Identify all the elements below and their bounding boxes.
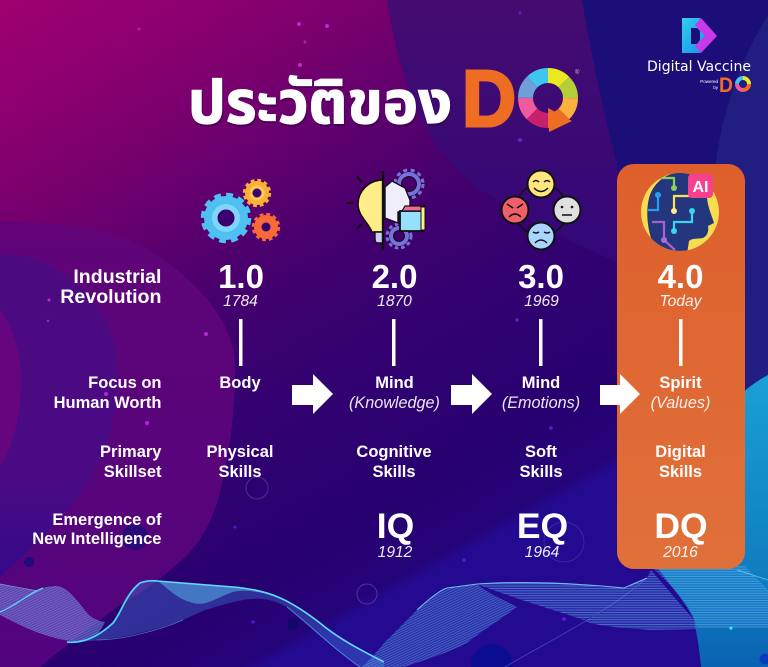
row heading: Primary Skillset (100, 443, 162, 481)
logo mark (682, 18, 717, 53)
sad face (528, 222, 554, 250)
powered by: Powered (700, 79, 718, 84)
column 3.0: 1964 (525, 544, 560, 561)
ring Q (526, 76, 570, 120)
icon: AI head (641, 172, 719, 254)
column 2.0 (349, 258, 440, 561)
registered mark: ® (575, 69, 580, 76)
column 4.0: 4.0 (658, 258, 703, 295)
right ribbon lower (584, 570, 697, 630)
arrow 2 (451, 374, 492, 414)
small DQ: D (719, 74, 733, 97)
row heading: Emergence of New Intelligence: Emergence of (52, 511, 162, 529)
column 3.0: EQ (517, 506, 568, 546)
column 4.0: DQ (654, 506, 708, 546)
icon: emotion faces (502, 170, 580, 250)
letter D: D (462, 54, 516, 143)
row heading: Emergence of New Intelligence (32, 511, 162, 548)
left ribbon lobe (0, 584, 105, 642)
right ribbon top (477, 578, 647, 620)
angry face (502, 196, 528, 224)
column 4.0: Spirit (659, 374, 702, 392)
row heading: Focus on Human Worth (54, 374, 162, 412)
column 2.0: 1870 (377, 293, 412, 310)
icon: gears (202, 180, 279, 242)
column 2.0: Skills (372, 463, 416, 481)
row heading: Industrial Revolution (60, 266, 162, 308)
column 2.0: Cognitive (356, 443, 432, 461)
column 3.0: Mind (522, 374, 560, 392)
decorative particles and circles (24, 12, 584, 667)
upper mesh of ribbon (157, 581, 275, 604)
row heading: Primary Skillset: Skillset (104, 463, 162, 481)
column 1.0: 1.0 (218, 258, 264, 295)
row heading: Emergence of New Intelligence: New Intelligence (32, 530, 162, 548)
column 3.0 (502, 258, 580, 561)
row heading: Focus on Human Worth: Human Worth (54, 394, 162, 412)
column 1.0 (207, 258, 273, 481)
arrow 1 (292, 374, 333, 414)
happy face (528, 170, 554, 198)
column 1.0: Physical (207, 443, 273, 461)
column 1.0: Skills (218, 463, 262, 481)
logo name: Digital Vaccine (647, 59, 751, 75)
center-left ribbon body (67, 581, 384, 667)
arrow 3 (600, 374, 640, 414)
column 2.0: (Knowledge) (349, 394, 440, 412)
column 4.0: Digital (655, 443, 706, 461)
AI badge: AI (692, 179, 708, 196)
column 3.0: 1969 (524, 293, 559, 310)
row heading: Focus on Human Worth: Focus on (88, 374, 162, 392)
column 3.0: (Emotions) (502, 394, 580, 412)
row heading: Industrial Revolution: Industrial (73, 266, 162, 288)
row heading: Primary Skillset: Primary (100, 443, 162, 461)
DQ logo (462, 54, 580, 143)
neutral face (554, 196, 580, 224)
column 3.0: 3.0 (518, 258, 564, 295)
column 3.0: Skills (519, 463, 563, 481)
Digital Vaccine logo (647, 18, 751, 97)
column 4.0: 2016 (662, 544, 698, 561)
column 4.0: (Values) (651, 394, 710, 412)
Q pointer (548, 108, 572, 132)
mesh over cyan (651, 566, 768, 628)
column 4.0: Skills (659, 463, 702, 481)
column 1.0: 1784 (223, 293, 258, 310)
waves: bottom mesh ribbons (0, 566, 768, 667)
column 2.0: Mind (375, 374, 414, 392)
column 1.0: Body (219, 374, 261, 392)
column 2.0: 1912 (378, 544, 413, 561)
row heading: Industrial Revolution: Revolution (60, 286, 162, 308)
column 3.0: Soft (525, 443, 558, 461)
title text: ประวัติของ (188, 69, 452, 136)
highlight panel: 4.0 column (617, 164, 745, 569)
column 4.0 (651, 258, 710, 561)
column 4.0: Today (660, 293, 703, 310)
column 2.0: IQ (377, 506, 414, 546)
Digital Vaccine logo: by (713, 85, 719, 90)
icon: lightbulb and mind (347, 170, 425, 250)
column 2.0: 2.0 (372, 258, 417, 295)
right ribbon patch (362, 584, 517, 667)
